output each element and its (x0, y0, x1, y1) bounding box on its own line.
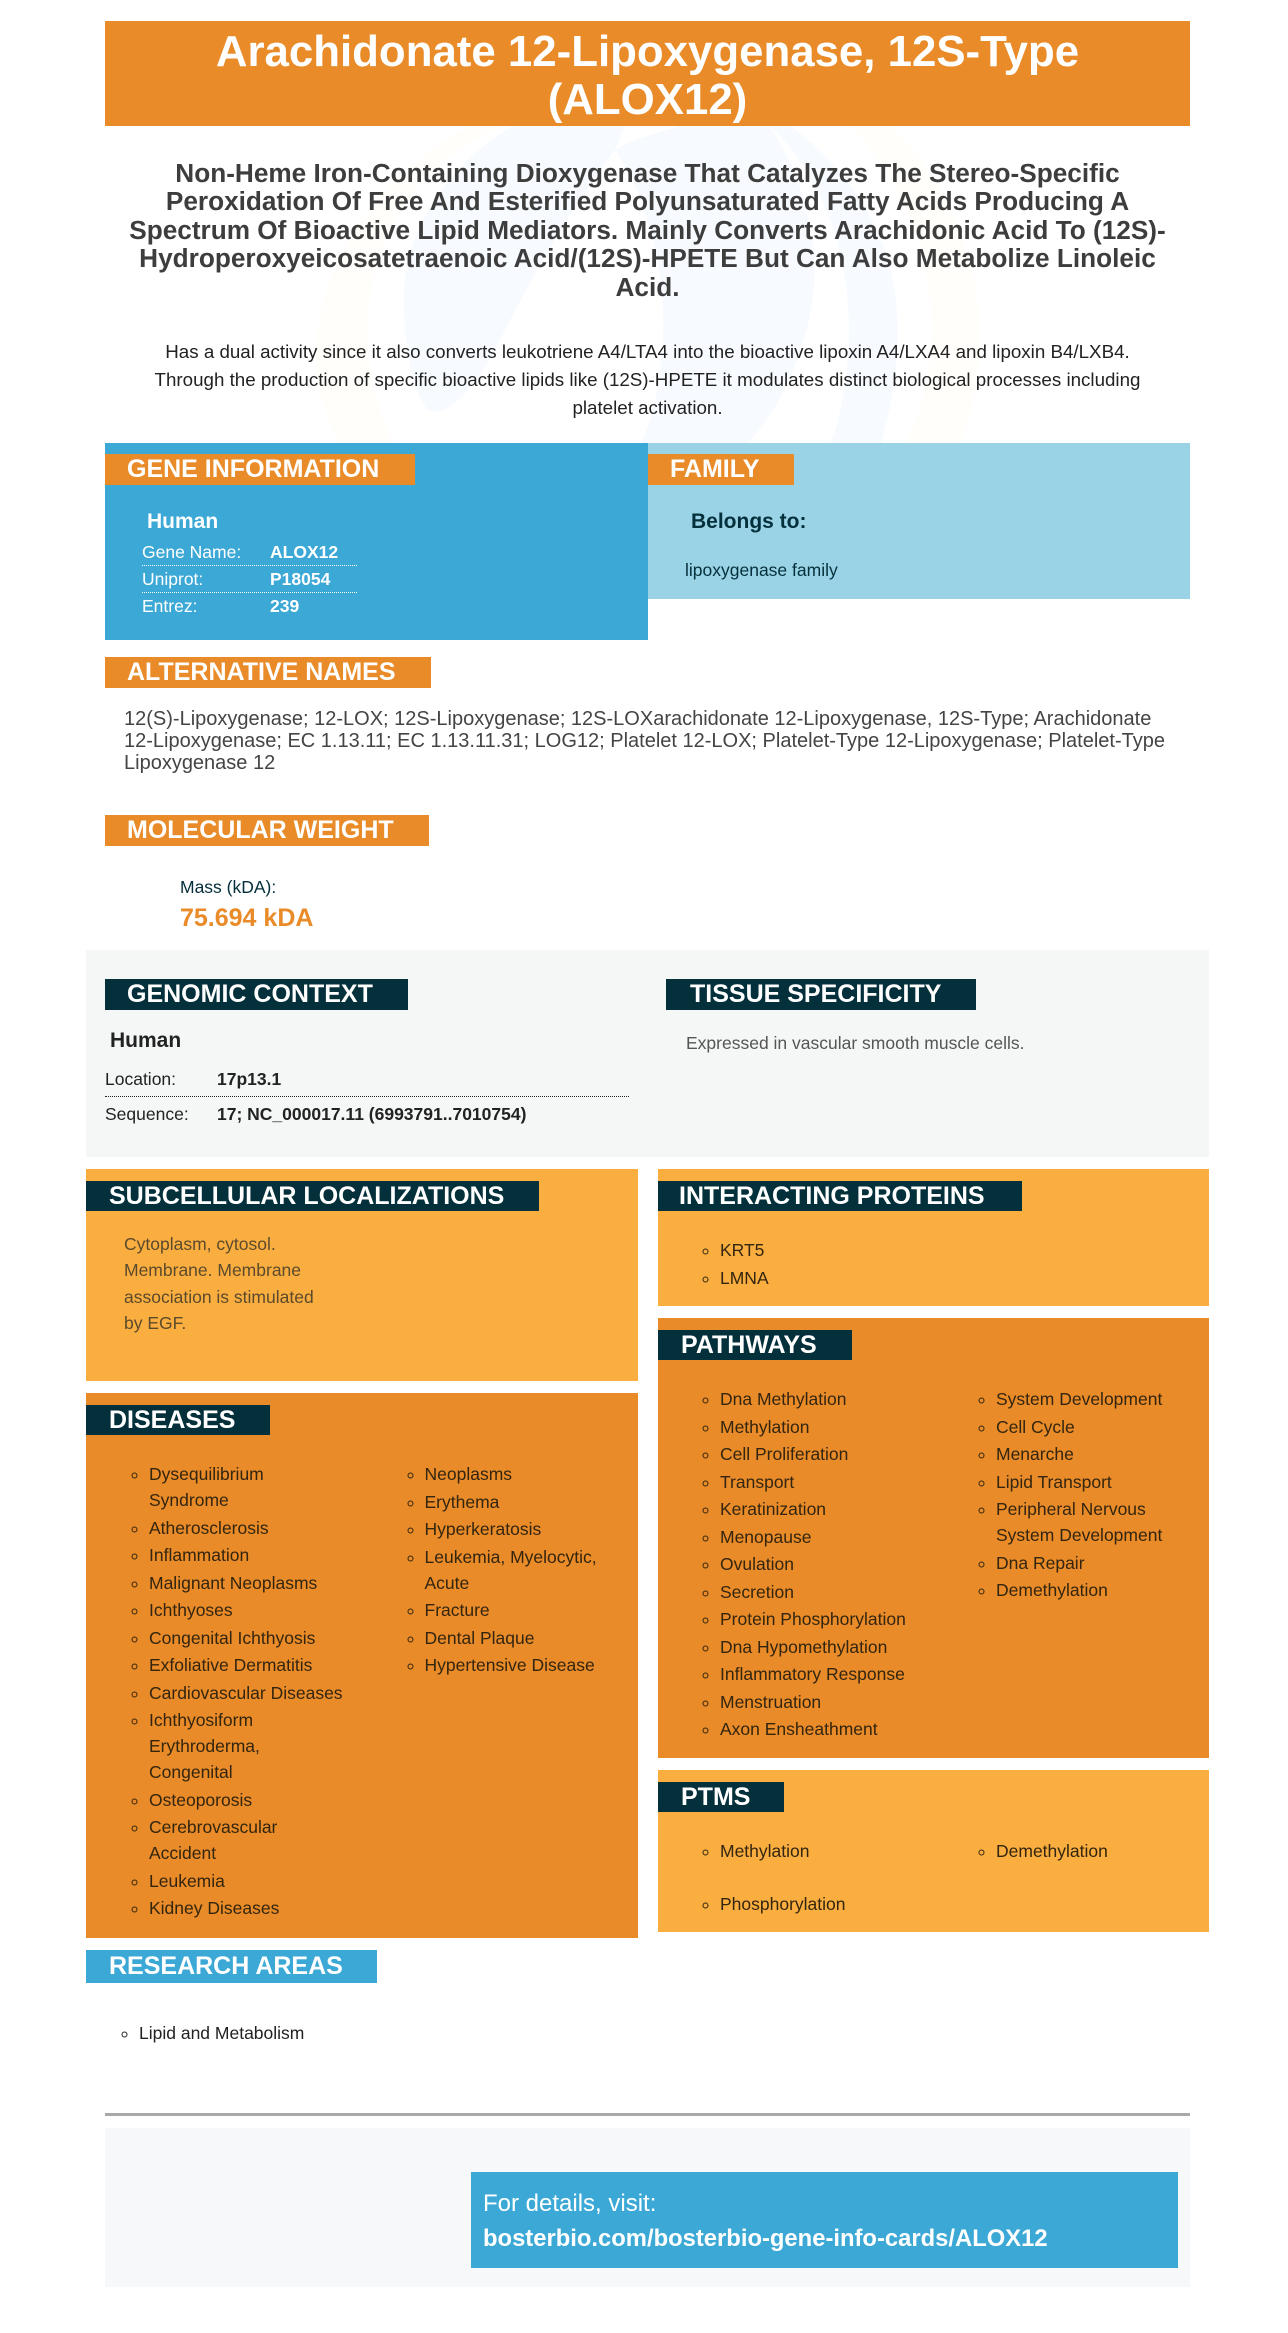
heading: pathways (658, 1330, 852, 1360)
alternative names text (124, 708, 1165, 774)
panel: interacting proteins (658, 1169, 1209, 1306)
pathways list column 2: Menarche (996, 1444, 1074, 1464)
heading: family (648, 454, 794, 485)
gene identifiers table: Uniprot: (142, 569, 203, 589)
subtitle (129, 158, 1166, 302)
panel: diseases (86, 1393, 638, 1938)
diseases list column 1: Accident (149, 1843, 216, 1863)
diseases list column 1: Osteoporosis (149, 1790, 252, 1810)
pathways list column 2: Demethylation (996, 1580, 1108, 1600)
footer panel (105, 2128, 1190, 2287)
gene identifiers table (142, 542, 357, 616)
heading: molecular weight: MOLECULAR WEIGHT (127, 816, 394, 844)
subtitle: Spectrum Of Bioactive Lipid Mediators. Mainly Converts Arachidonic Acid To (12S)- (129, 214, 1166, 244)
description: Through the production of specific bioactive lipids like (12S)-HPETE it modulates distinct biological processes including (155, 369, 1140, 390)
pathways list column 1: Menopause (720, 1526, 811, 1546)
ptm list column 1: Phosphorylation (720, 1894, 846, 1914)
genomic location table: 17; NC_000017.11 (6993791..7010754) (217, 1104, 526, 1124)
ptm list column 1: Methylation (720, 1841, 810, 1861)
diseases list column 2: Erythema (424, 1492, 499, 1512)
panel: gene information (105, 443, 648, 640)
subtitle: Acid. (615, 272, 680, 302)
pathways list column 1: Secretion (720, 1582, 794, 1602)
title banner: Arachidonate 12-Lipoxygenase, 12S-Type (216, 27, 1079, 76)
pathways list column 2: Lipid Transport (996, 1472, 1112, 1492)
gene identifiers table: 239 (270, 596, 299, 616)
diseases list column 1: Ichthyosiform (149, 1710, 253, 1730)
pathways list column 1 (702, 1389, 906, 1739)
pathways list column 2: System Development (996, 1525, 1162, 1545)
genomic location table (105, 1069, 629, 1124)
interacting proteins list (702, 1240, 769, 1288)
diseases list column 1: Inflammation (149, 1545, 249, 1565)
heading: family: FAMILY (670, 455, 759, 483)
pathways list column 1: Menstruation (720, 1692, 821, 1712)
pathways list column 1: Dna Methylation (720, 1389, 846, 1409)
diseases list column 1: Congenital Ichthyosis (149, 1628, 315, 1648)
heading: interacting proteins: INTERACTING PROTEINS (679, 1182, 985, 1210)
heading: subcellular localizations: SUBCELLULAR LOCALIZATIONS (109, 1182, 504, 1210)
call to action box (471, 2172, 1178, 2268)
subcellular text: Cytoplasm, cytosol. (124, 1234, 276, 1254)
heading: tissue specificity: TISSUE SPECIFICITY (690, 980, 941, 1008)
pathways list column 2: System Development (996, 1389, 1162, 1409)
mass label: Mass (kDA): (180, 877, 276, 897)
diseases list column 1: Exfoliative Dermatitis (149, 1655, 312, 1675)
pathways list column 1: Inflammatory Response (720, 1664, 905, 1684)
description (154, 341, 1140, 418)
diseases list column 1 (132, 1464, 343, 1918)
heading: research areas (86, 1950, 377, 1983)
genomic location table: Sequence: (105, 1104, 189, 1124)
pathways list column 2: Cell Cycle (996, 1416, 1075, 1436)
heading: genomic context: GENOMIC CONTEXT (127, 980, 373, 1008)
diseases list column 1: Syndrome (149, 1490, 229, 1510)
pathways list column 1: Axon Ensheathment (720, 1719, 878, 1739)
heading: ptms: PTMS (681, 1783, 750, 1811)
diseases list column 2: Neoplasms (424, 1464, 512, 1484)
diseases list column 2: Leukemia, Myelocytic, (424, 1546, 597, 1566)
gene identifiers table: P18054 (270, 569, 330, 589)
interacting proteins list: KRT5 (720, 1240, 764, 1260)
ptm list column 2: Demethylation (996, 1841, 1108, 1861)
gene identifiers table: ALOX12 (270, 542, 338, 562)
pathways list column 1: Protein Phosphorylation (720, 1609, 906, 1629)
alternative names text: Lipoxygenase 12 (124, 752, 275, 774)
panel: pathways (658, 1318, 1209, 1758)
alternative names text: 12-Lipoxygenase; EC 1.13.11; EC 1.13.11.31; LOG12; Platelet 12-LOX; Platelet-Type 12-Lipoxygenase; Platelet-Type (124, 730, 1165, 752)
heading: pathways: PATHWAYS (681, 1331, 817, 1359)
subcellular text: association is stimulated (124, 1287, 314, 1307)
species label: Human (110, 1029, 181, 1052)
diseases list column 1: Atherosclerosis (149, 1518, 269, 1538)
diseases list column 1: Ichthyoses (149, 1600, 233, 1620)
heading: research areas: RESEARCH AREAS (109, 1952, 343, 1980)
diseases list column 1: Cardiovascular Diseases (149, 1682, 343, 1702)
background watermark logo (280, 126, 1000, 446)
panel: family (648, 443, 1190, 598)
subtitle: Non-Heme Iron-Containing Dioxygenase That Catalyzes The Stereo-Specific (175, 158, 1120, 188)
subtitle: Hydroperoxyeicosatetraenoic Acid/(12S)-HPETE But Can Also Metabolize Linoleic (139, 243, 1156, 273)
genomic location table: Location: (105, 1069, 176, 1089)
details url: bosterbio.com/bosterbio-gene-info-cards/ALOX12 (483, 2225, 1048, 2252)
diseases list column 1: Malignant Neoplasms (149, 1572, 317, 1592)
heading: ptms (658, 1782, 784, 1812)
pathways list column 1: Keratinization (720, 1499, 826, 1519)
subcellular text: Membrane. Membrane (124, 1260, 301, 1280)
diseases list column 2: Dental Plaque (424, 1628, 534, 1648)
mass value: 75.694 kDA (180, 904, 313, 932)
pathways list column 1: Dna Hypomethylation (720, 1636, 887, 1656)
panel: ptms (658, 1770, 1209, 1932)
diseases list column 1: Dysequilibrium (149, 1464, 264, 1484)
genomic location table: 17p13.1 (217, 1069, 281, 1089)
alternative names text: 12(S)-Lipoxygenase; 12-LOX; 12S-Lipoxygenase; 12S-LOXarachidonate 12-Lipoxygenase, 12S-Type; Arachidonate (124, 708, 1151, 730)
details label: For details, visit: (483, 2190, 656, 2217)
title banner (105, 21, 1190, 126)
family name: lipoxygenase family (685, 560, 838, 580)
subcellular text (124, 1234, 314, 1333)
ptm list column 1 (702, 1841, 846, 1914)
heading: diseases: DISEASES (109, 1406, 235, 1434)
diseases list column 1: Kidney Diseases (149, 1898, 279, 1918)
diseases list column 2: Acute (424, 1572, 469, 1592)
heading: gene information: GENE INFORMATION (127, 455, 379, 483)
panel: subcellular localizations (86, 1169, 638, 1381)
diseases list column 2: Hyperkeratosis (424, 1519, 541, 1539)
pathways list column 2: Dna Repair (996, 1552, 1085, 1572)
pathways list column 2 (978, 1389, 1162, 1600)
diseases list column 1: Congenital (149, 1762, 233, 1782)
description: platelet activation. (572, 397, 723, 418)
pathways list column 1: Methylation (720, 1416, 810, 1436)
pathways list column 1: Transport (720, 1472, 794, 1492)
diseases list column 2: Fracture (424, 1600, 490, 1620)
title banner: (ALOX12) (548, 75, 747, 124)
diseases list column 1: Cerebrovascular (149, 1817, 277, 1837)
subcellular text: by EGF. (124, 1313, 186, 1333)
description: Has a dual activity since it also converts leukotriene A4/LTA4 into the bioactive lipoxin A4/LXA4 and lipoxin B4/LXB4. (165, 341, 1130, 362)
tissue specificity text: Expressed in vascular smooth muscle cells. (686, 1033, 1024, 1053)
diseases list column 2: Hypertensive Disease (424, 1655, 595, 1675)
heading: alternative names: ALTERNATIVE NAMES (127, 658, 396, 686)
belongs to label: Belongs to: (691, 510, 806, 533)
research areas list: Lipid and Metabolism (139, 2023, 304, 2043)
heading: diseases (86, 1405, 270, 1435)
pathways list column 1: Ovulation (720, 1554, 794, 1574)
interacting proteins list: LMNA (720, 1268, 769, 1288)
pathways list column 1: Cell Proliferation (720, 1444, 848, 1464)
gene identifiers table: Gene Name: (142, 542, 241, 562)
species label: Human (147, 510, 218, 533)
subtitle: Peroxidation Of Free And Esterified Polyunsaturated Fatty Acids Producing A (166, 186, 1129, 216)
diseases list column 1: Erythroderma, (149, 1736, 260, 1756)
pathways list column 2: Peripheral Nervous (996, 1499, 1146, 1519)
gene identifiers table: Entrez: (142, 596, 197, 616)
diseases list column 2 (408, 1464, 597, 1675)
diseases list column 1: Leukemia (149, 1870, 225, 1890)
panel: genomic context and tissue specificity (86, 950, 1209, 1157)
